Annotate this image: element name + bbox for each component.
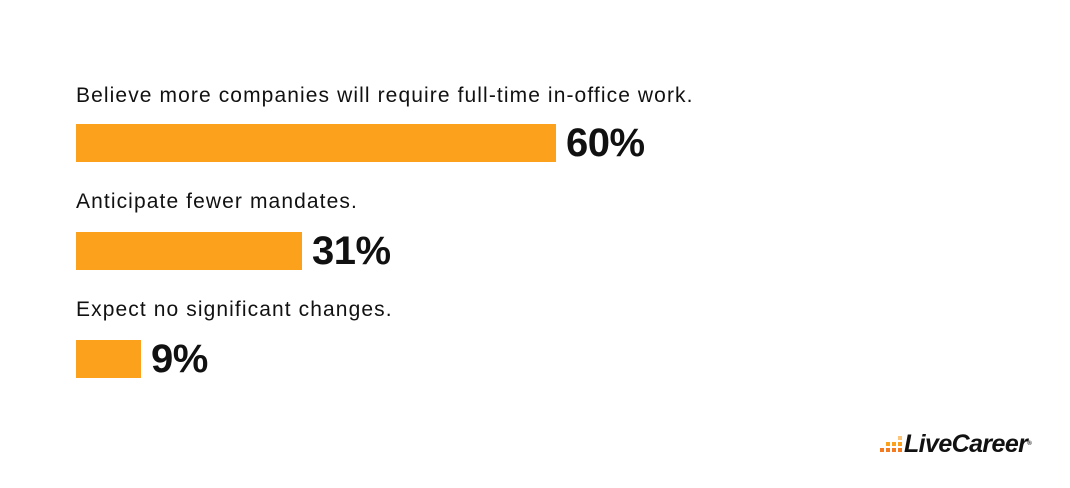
bar row: 31% [76, 229, 391, 273]
bar: 9% [76, 340, 141, 378]
label: no significant changes: Expect no significant changes. [76, 298, 393, 321]
bar: 60% [76, 124, 556, 162]
value: 60%: 60% [566, 121, 645, 165]
label: fewer mandates: Anticipate fewer mandates. [76, 190, 358, 213]
logo text: LiveCareer® [904, 430, 1031, 458]
logo: LiveCareer [880, 430, 1032, 458]
bar row: 9% [76, 337, 208, 381]
value: 31%: 31% [312, 229, 391, 273]
icon: logo squares [880, 436, 902, 452]
bar row: 60% [76, 121, 645, 165]
label: full-time in-office: Believe more companies will require full-time in-office work. [76, 84, 694, 107]
bar: 31% [76, 232, 302, 270]
value: 9%: 9% [151, 337, 208, 381]
